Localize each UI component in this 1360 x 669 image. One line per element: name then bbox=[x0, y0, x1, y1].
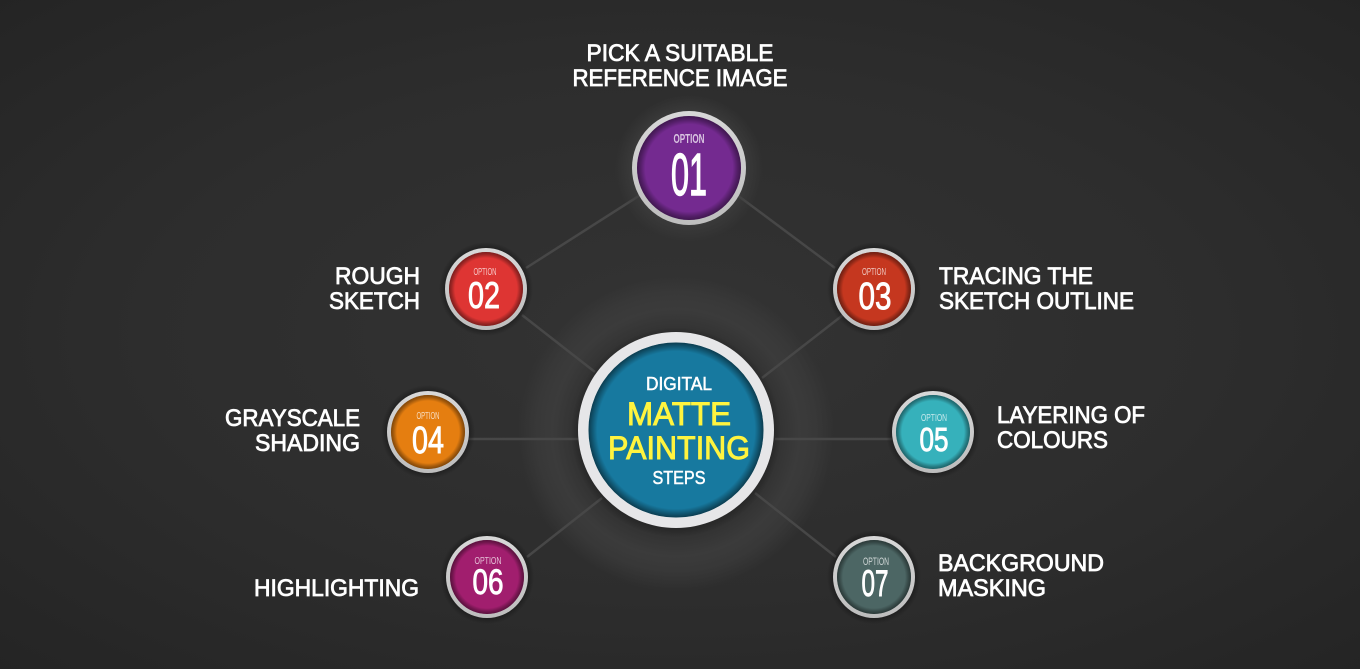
node 01: OPTION bbox=[674, 131, 704, 146]
node 07 bbox=[827, 530, 921, 624]
label 05: LAYERING OF bbox=[997, 402, 1145, 429]
node 01 bbox=[615, 94, 763, 242]
node 04 bbox=[381, 385, 475, 479]
node 02: OPTION bbox=[474, 267, 496, 278]
label 04: SHADING bbox=[255, 430, 360, 457]
label 07 bbox=[938, 550, 1104, 602]
hub title bbox=[608, 374, 750, 488]
central hub bbox=[571, 327, 781, 537]
label 05 bbox=[997, 402, 1145, 454]
hub title: MATTE bbox=[627, 396, 731, 432]
label 03: SKETCH OUTLINE bbox=[939, 288, 1134, 315]
node 01: 01 bbox=[671, 142, 707, 208]
node 02 bbox=[439, 242, 533, 336]
label 01: REFERENCE IMAGE bbox=[572, 65, 788, 92]
label 03 bbox=[939, 263, 1134, 315]
node 05 bbox=[886, 385, 980, 479]
node 03: OPTION bbox=[862, 267, 886, 278]
label 04: GRAYSCALE bbox=[225, 405, 360, 432]
node 02: 02 bbox=[468, 275, 500, 316]
node 04: 04 bbox=[412, 420, 444, 462]
node 04: OPTION bbox=[416, 411, 440, 422]
label 05: COLOURS bbox=[997, 427, 1108, 454]
node 07: 07 bbox=[862, 563, 888, 604]
label 01: PICK A SUITABLE bbox=[586, 40, 774, 67]
node 06: OPTION bbox=[474, 556, 502, 567]
node 05: 05 bbox=[920, 421, 948, 458]
label 03: TRACING THE bbox=[939, 263, 1093, 290]
label 07: MASKING bbox=[938, 575, 1046, 602]
node 03 bbox=[827, 242, 921, 336]
label 06: HIGHLIGHTING bbox=[254, 575, 419, 602]
label 07: BACKGROUND bbox=[938, 550, 1104, 577]
node 05: OPTION bbox=[921, 413, 947, 424]
label 04 bbox=[225, 405, 360, 457]
label 02: SKETCH bbox=[329, 288, 420, 315]
label 01 bbox=[572, 40, 788, 92]
hub title: DIGITAL bbox=[646, 374, 712, 394]
node 06: 06 bbox=[472, 563, 504, 602]
hub title: STEPS bbox=[652, 468, 706, 488]
central glow rings bbox=[518, 275, 834, 591]
node 06 bbox=[440, 530, 534, 624]
hub title: PAINTING bbox=[608, 430, 750, 466]
label 02: ROUGH bbox=[335, 263, 420, 290]
label 02 bbox=[329, 263, 420, 315]
connector lines bbox=[468, 192, 892, 557]
node 03: 03 bbox=[858, 276, 892, 318]
node 07: OPTION bbox=[863, 556, 889, 568]
